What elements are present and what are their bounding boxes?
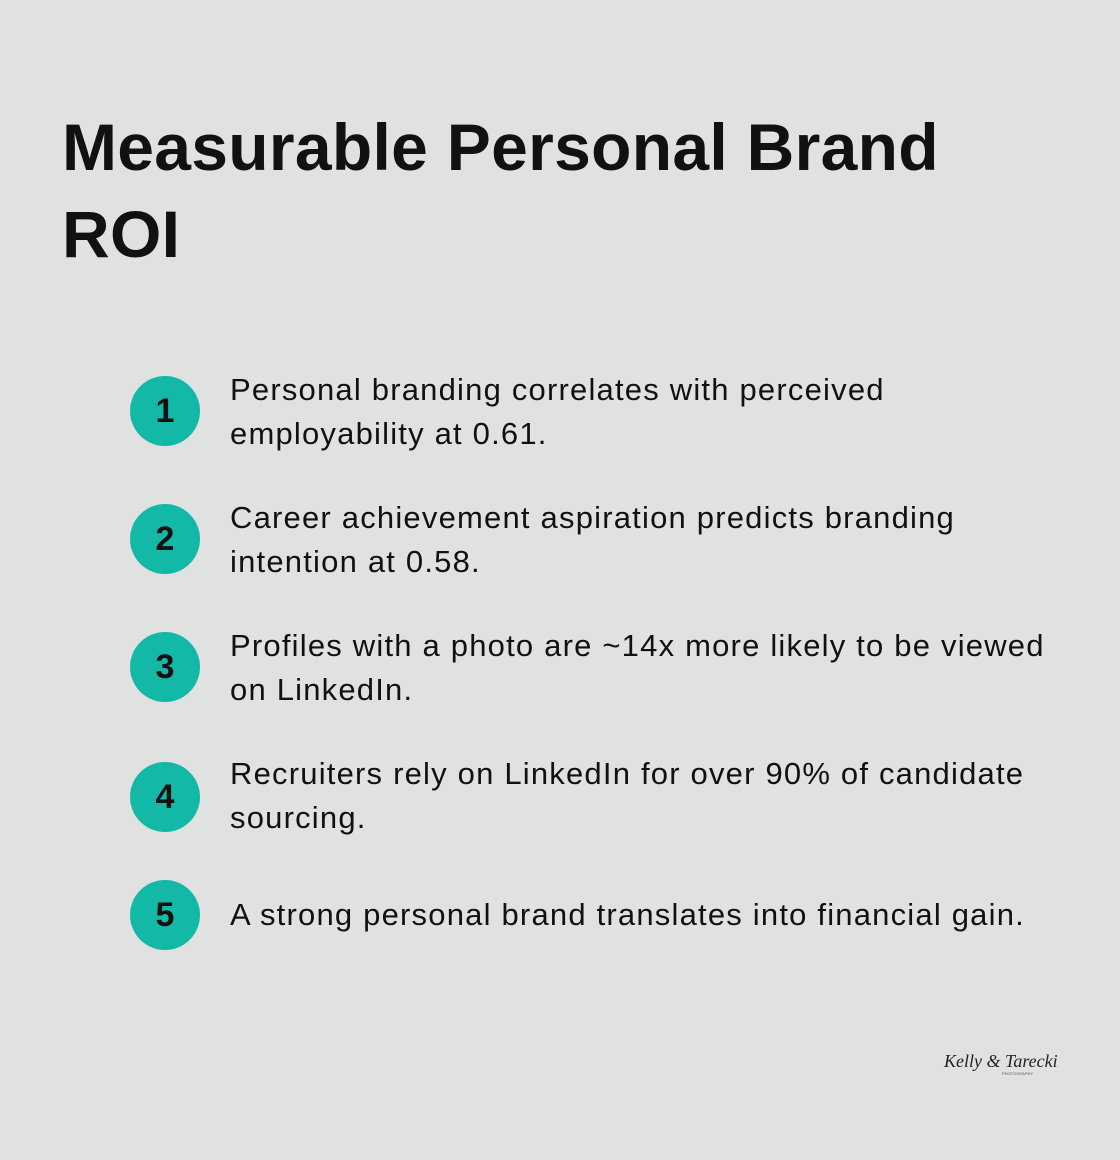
title: Measurable Personal Brand <box>62 110 939 184</box>
text 4: sourcing. <box>230 800 367 835</box>
badge 2: 2 <box>156 520 174 558</box>
badge 1 <box>130 376 200 446</box>
text 1: Personal branding correlates with perceived <box>230 372 885 407</box>
text 3 <box>230 628 1045 707</box>
badge 2 <box>130 504 200 574</box>
text 2 <box>230 500 955 579</box>
item 1 <box>130 372 885 451</box>
badge 4: 4 <box>156 778 174 816</box>
text 1: employability at 0.61. <box>230 416 548 451</box>
text 4: Recruiters rely on LinkedIn for over 90% of candidate <box>230 756 1024 791</box>
badge 4 <box>130 762 200 832</box>
text 1 <box>230 372 885 451</box>
logo signature: PHOTOGRAPHY <box>1002 1071 1033 1076</box>
item 5 <box>130 880 1025 950</box>
badge 3: 3 <box>156 648 174 686</box>
text 4 <box>230 756 1024 835</box>
badge 5 <box>130 880 200 950</box>
text 2: Career achievement aspiration predicts branding <box>230 500 955 535</box>
badge 3 <box>130 632 200 702</box>
text 5: A strong personal brand translates into financial gain. <box>230 897 1025 932</box>
item 3 <box>130 628 1045 707</box>
logo signature: Kelly & Tarecki <box>943 1051 1057 1071</box>
item 4 <box>130 756 1024 835</box>
title: ROI <box>62 197 180 271</box>
item 2 <box>130 500 955 579</box>
text 2: intention at 0.58. <box>230 544 481 579</box>
badge 5: 5 <box>156 896 174 934</box>
text 3: Profiles with a photo are ~14x more likely to be viewed <box>230 628 1045 663</box>
badge 1: 1 <box>156 392 174 430</box>
text 3: on LinkedIn. <box>230 672 413 707</box>
title <box>62 110 939 271</box>
